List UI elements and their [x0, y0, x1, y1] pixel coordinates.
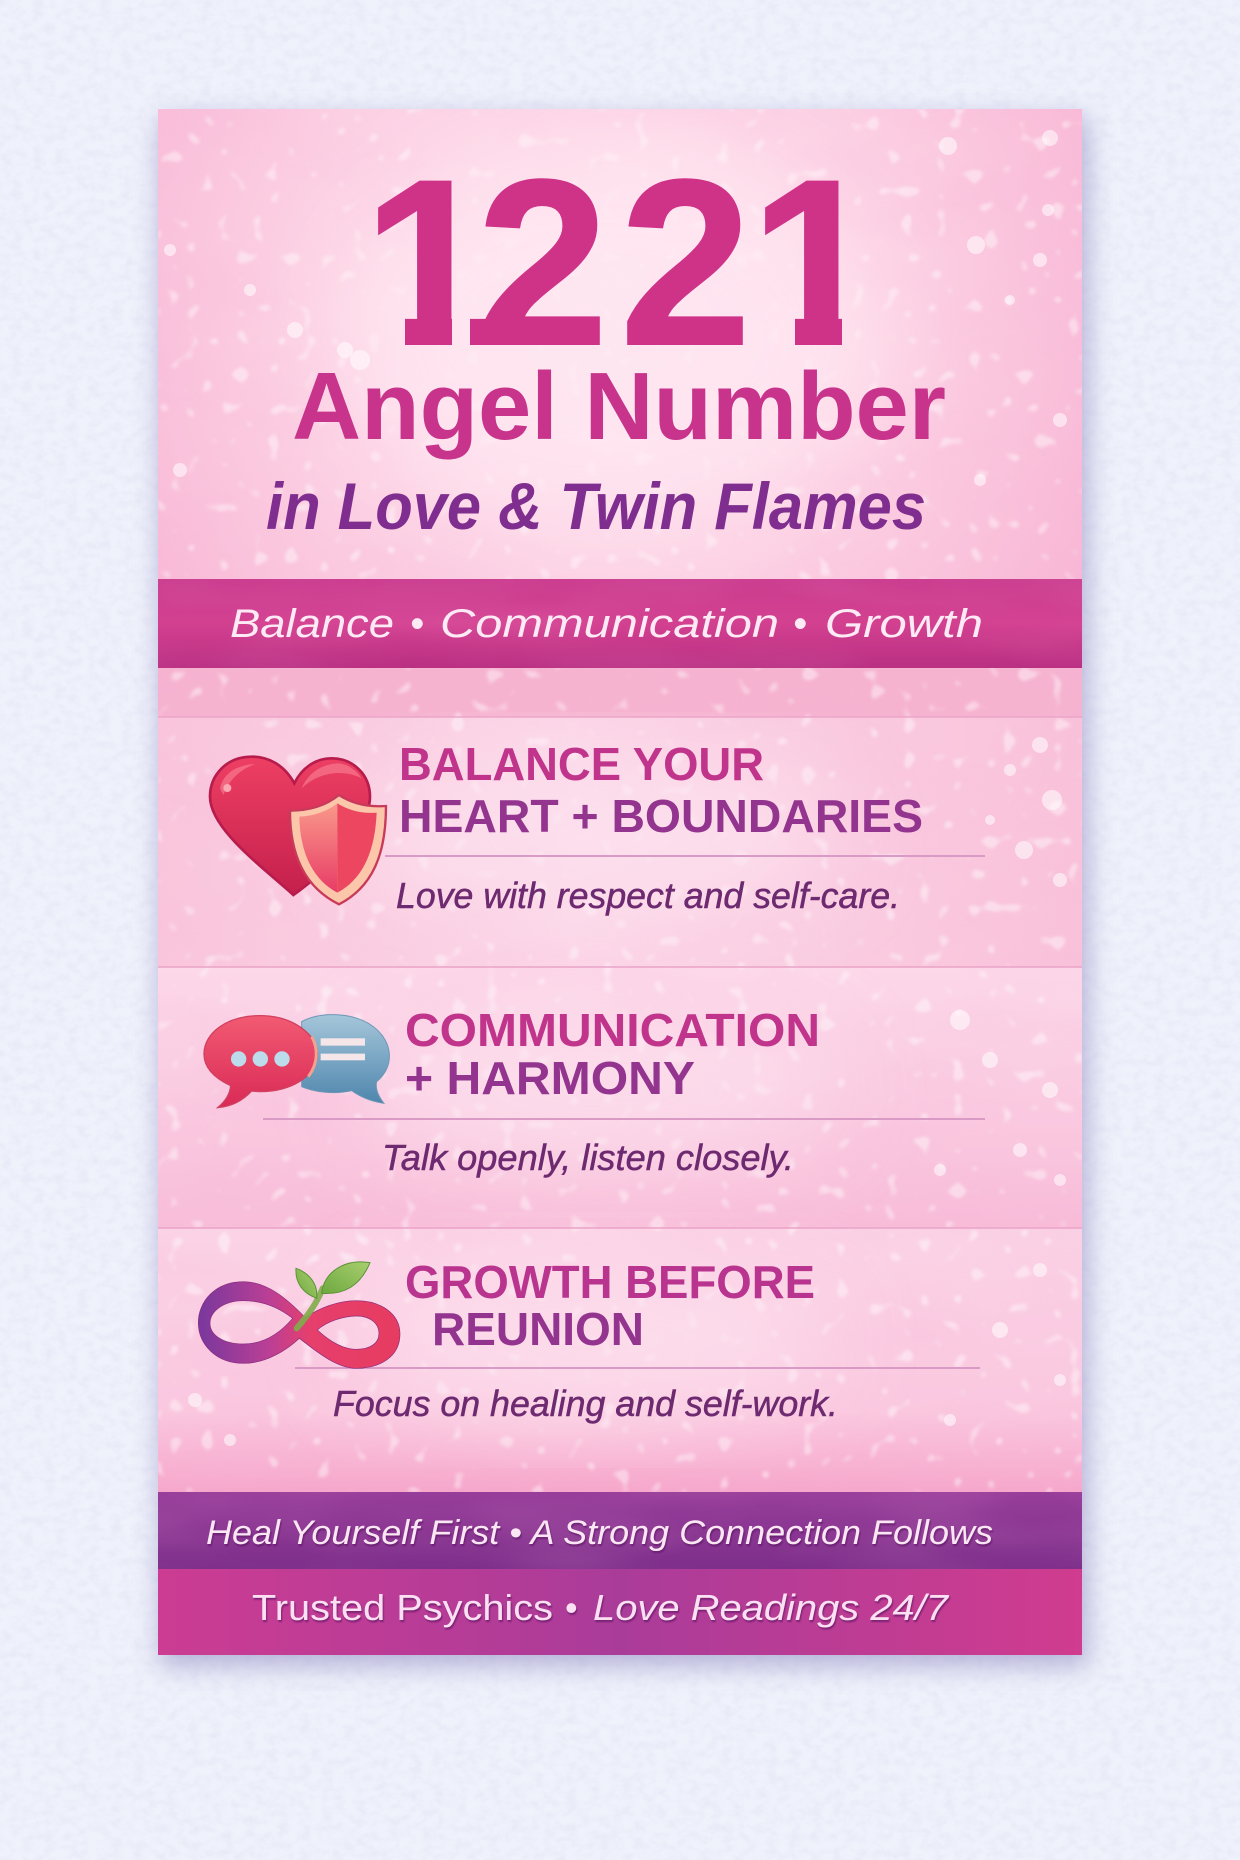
subheading: in Love and Twin Flames: in Love & Twin Flames: [266, 469, 926, 543]
banner: trusted psychics: Love Readings 24/7: [593, 1587, 950, 1628]
text: growth description: Focus on healing and self-work.: [333, 1383, 838, 1424]
panel: communication + harmony: [204, 1004, 985, 1178]
text: balance description: Love with respect and self-care.: [396, 875, 900, 916]
heading: growth: REUNION: [432, 1303, 644, 1355]
text: communication description: Talk openly, listen closely.: [382, 1137, 794, 1178]
panel: growth before reunion: [198, 1256, 980, 1424]
heading: communication: + HARMONY: [405, 1052, 695, 1104]
banner: trusted psychics: Trusted Psychics: [252, 1587, 553, 1628]
banner: balance communication growth: •: [793, 602, 807, 646]
banner: balance communication growth: Communication: [440, 602, 779, 646]
banner: heal yourself first: [158, 1492, 1082, 1569]
panel: header background: [158, 109, 1082, 579]
panel: communication background: [158, 967, 1082, 1228]
heading: growth: GROWTH BEFORE: [405, 1256, 815, 1308]
panel: balance your heart + boundaries: [210, 738, 985, 916]
poster card: [158, 109, 1082, 1655]
heading: Angel Number: Angel Number: [292, 353, 946, 460]
banner: heal yourself first: Heal Yourself First • A Strong Connection Follows: [206, 1514, 993, 1552]
panel: strip under banner: [158, 668, 1082, 717]
icon: speech bubbles: [204, 1015, 389, 1108]
banner: balance communication growth: •: [410, 602, 424, 646]
banner: balance communication growth: [158, 579, 1082, 668]
banner: trusted psychics: [158, 1569, 1082, 1655]
heading: balance: BALANCE YOUR: [399, 738, 764, 790]
icon: heart and shield: [210, 757, 386, 904]
title: 1221: 1221: [363, 131, 881, 395]
heading: growth: [405, 1256, 815, 1355]
panel: balance background: [158, 717, 1082, 967]
banner: trusted psychics: •: [565, 1587, 578, 1628]
banner: balance communication growth: Growth: [825, 602, 983, 646]
heading: communication: [405, 1004, 820, 1104]
heading: balance: HEART + BOUNDARIES: [399, 790, 923, 842]
heading: communication: COMMUNICATION: [405, 1004, 820, 1056]
panel: growth background: [158, 1228, 1082, 1492]
icon: infinity sprout: [198, 1262, 400, 1368]
card shadow: [160, 118, 1088, 1666]
banner: balance communication growth: Balance: [230, 602, 394, 646]
heading: balance: [399, 738, 923, 842]
